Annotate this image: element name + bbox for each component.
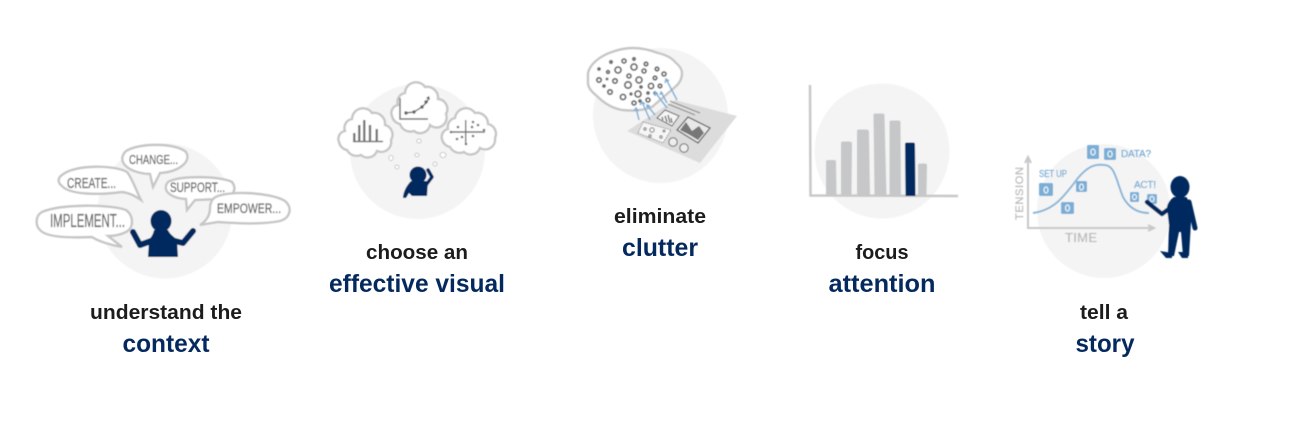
illustration: clutter rising from a dashboard (588, 48, 737, 183)
thought cloud: bar chart (338, 108, 393, 158)
thought cloud: line chart (391, 82, 447, 133)
axes (810, 85, 958, 196)
dashboard sheet (627, 100, 737, 163)
story labels (1039, 149, 1156, 191)
thought cloud: scatter plot (442, 108, 496, 155)
speech bubble: empower: EMPOWER... (217, 200, 281, 216)
speech bubble: create (59, 167, 141, 200)
panel: eliminate clutter (588, 48, 737, 262)
heading: understand the context (90, 302, 242, 358)
speech bubble: support: SUPPORT... (170, 179, 225, 195)
story curve (1033, 165, 1149, 213)
speech bubble: create: CREATE... (67, 175, 116, 192)
heading: choose an effective visual (329, 242, 505, 298)
illustration: person with speech bubbles (37, 144, 290, 278)
clutter cloud (588, 48, 682, 111)
story labels: ACT! (1134, 180, 1156, 191)
icon: presenter (1147, 176, 1195, 258)
bars (826, 114, 927, 196)
heading: focus attention: attention (828, 270, 936, 298)
heading: focus attention (828, 242, 936, 298)
heading: tell a story (1076, 302, 1135, 358)
panel: choose an effective visual (329, 82, 505, 298)
heading: understand the context: understand the (90, 302, 242, 324)
heading: choose an effective visual: effective visual (329, 270, 505, 298)
heading: tell a story: tell a (1080, 302, 1129, 324)
speech bubble: implement (37, 206, 132, 247)
icon: thinking person (403, 166, 432, 198)
panel: tell a story (1014, 144, 1195, 358)
heading: eliminate clutter: eliminate (614, 206, 706, 228)
illustration: person thinking about charts (338, 82, 496, 219)
axis labels: TENSION (1014, 167, 1026, 220)
thought bubbles (389, 139, 446, 169)
story labels: SET UP (1039, 169, 1067, 180)
icon: shrugging person (133, 210, 193, 257)
panel: focus attention (810, 84, 958, 298)
heading: focus attention: focus (856, 242, 908, 264)
heading: understand the context: context (122, 330, 210, 358)
speech bubble: change (122, 145, 187, 187)
heading: tell a story: story (1076, 330, 1135, 358)
heading: eliminate clutter: clutter (622, 234, 698, 262)
heading: eliminate clutter (614, 206, 706, 262)
axes (1025, 157, 1154, 231)
illustration: narrative arc with presenter (1014, 144, 1195, 278)
clutter dots (597, 58, 666, 105)
speech bubble: implement: IMPLEMENT... (50, 211, 125, 231)
highlighted bar (905, 142, 916, 196)
illustration: bar chart with highlighted bar (810, 84, 958, 218)
arrows: elements moving into clutter (634, 79, 677, 120)
speech bubble: empower (200, 193, 290, 225)
story cards (1039, 145, 1157, 214)
story labels: DATA? (1121, 149, 1151, 160)
speech bubble: change: CHANGE... (129, 152, 178, 167)
speech bubble: support (166, 177, 234, 210)
axis labels: TIME (1065, 230, 1097, 245)
panel: understand the context (37, 144, 290, 358)
axis labels (1014, 167, 1097, 245)
card marks (1044, 149, 1154, 211)
heading: choose an effective visual: choose an (366, 242, 468, 264)
